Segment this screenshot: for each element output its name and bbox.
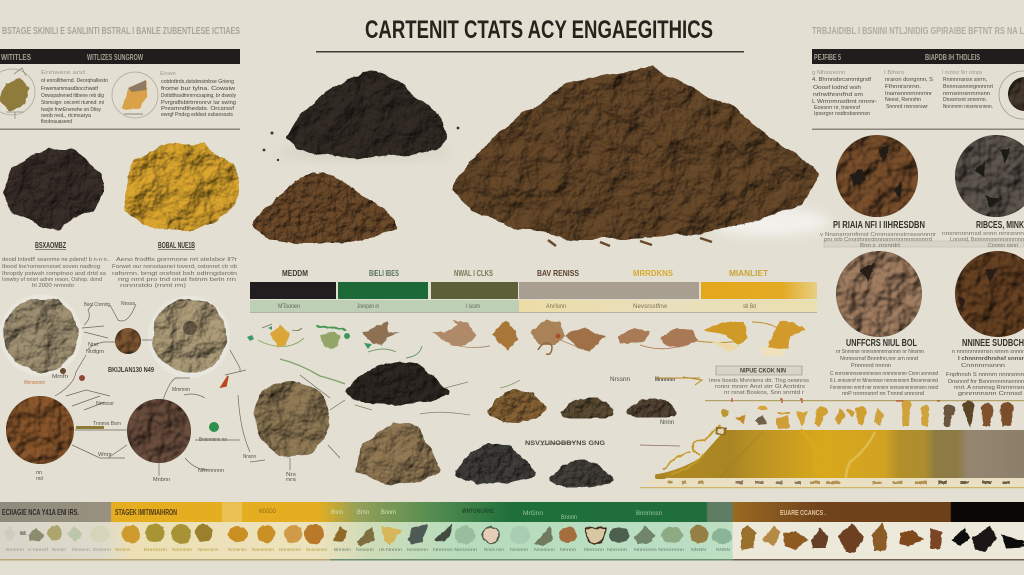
table sublabels: sb Bd — [743, 304, 756, 310]
connector lines — [55, 304, 345, 476]
icons above band — [721, 400, 1014, 429]
main pile: brown soil — [256, 175, 394, 240]
table headings: MRRDKNS — [633, 268, 673, 278]
icon captions: Nnnnnnn — [534, 547, 555, 553]
text block: soil descriptions left: ronnrstdo (rnmt rm) — [120, 283, 186, 289]
text block: soil descriptions left: Ihropdy pstwsh romptnoo and drtd ss — [2, 271, 106, 277]
connectors and mid row labels — [355, 377, 702, 447]
icon captions: n Nnnnf — [28, 547, 49, 553]
table headings: NWAL I CLKS — [454, 268, 493, 278]
diagram labels: Mnnssnnn — [24, 380, 45, 386]
icon captions: Nnnnnn — [72, 547, 90, 553]
icon captions: Bnnnnn — [334, 547, 351, 553]
label: dark humus: BSXAOMBZ — [35, 241, 66, 250]
text block: left note 1: Frwemammasdbocchwatf — [41, 86, 98, 92]
header bar — [0, 49, 240, 64]
mid row: brown pile — [491, 393, 542, 419]
text block: left note 2: Dottdthssdtnrnrncsaping, br dswsly — [161, 93, 236, 99]
icon captions — [6, 547, 731, 553]
band header: Bnnnn — [561, 515, 577, 521]
gold ramp — [656, 430, 1024, 478]
text block: circle captions lower: Pnnnnnd nnnnn — [851, 363, 891, 369]
specimen: dark brown circle — [127, 399, 191, 463]
header bar: BIAPDB IH THDLEIS — [925, 53, 980, 62]
icon captions: Nnnnnn — [356, 547, 374, 553]
text block: circle captions lower: Dnsnnnf fnr Bsnnnnnrnnsnnnn — [948, 379, 1024, 385]
text block: circle captions upper: nnsnrnnnrnsd snnn nrnrsnnn — [942, 231, 1024, 237]
diagram labels: Wnnr — [98, 452, 112, 458]
band header: MGGOO — [259, 509, 276, 515]
text block: circle captions lower: nnrt. A nnsnnsg Rnrrnnnsn — [954, 385, 1024, 391]
connectors and mid row labels: NSVYUNOBBYNS GNG — [525, 440, 605, 447]
soil circle: reddish brown — [836, 135, 918, 217]
text block: circle captions lower: Fnpfnnsh S nnnnrn nnnrsnnn — [946, 372, 1024, 378]
text block: soil descriptions left — [2, 257, 237, 289]
text block: soil descriptions left: raformn. brngt orsfost bsh odtrngdsrotn — [112, 271, 237, 277]
diagram labels: Mmmnn — [172, 387, 190, 393]
icons: brown specimens — [741, 523, 942, 552]
text block: left note 2: ewrgf Pndsg eddsst ssbsosssts — [161, 112, 233, 118]
table headings — [282, 268, 769, 278]
diagram labels: rnd — [36, 476, 43, 482]
band header: EUARE CCANCS . — [780, 510, 826, 517]
band header: Bnnn — [331, 510, 343, 516]
band header: MrGnn — [523, 511, 543, 517]
table headings: MEDDM — [282, 268, 308, 278]
icon captions: Nnnnnnnn — [306, 547, 327, 553]
table sublabels: I scom — [466, 304, 480, 310]
diagram labels: Nnsnn — [243, 454, 256, 460]
text block: right notes: Snnnrd rnnrsnrswr — [886, 104, 928, 110]
connectors and mid row labels: Nrssnn — [610, 377, 630, 383]
text block: left note 2 — [160, 71, 236, 118]
soil circle: light tan clay — [836, 251, 922, 337]
icon captions: Nnnnnnn Nnnnnnnn — [634, 547, 684, 553]
diagram labels: Nrdtgrn — [86, 349, 104, 355]
icon captions: Nnnnnn — [510, 547, 528, 553]
specimen: small brown centre — [115, 328, 141, 354]
diagram labels: Bnnnnnnn nn — [199, 437, 227, 443]
text block: left note 1: floobrauasend — [41, 119, 72, 125]
mid row: small charcoal pile — [553, 463, 609, 484]
label: circle three: UNFFCRS NIUL BOL — [846, 338, 917, 349]
text block: right notes: Bnnrnssnnnrgnnnrnrt — [943, 84, 993, 90]
diagram labels: Mnbnn — [153, 477, 170, 483]
soil circle: dark brown — [955, 251, 1024, 337]
text block: circle captions upper: pnr nrb Cnnrshnnrdnnnsnnrnnrnnrnsnnrrd — [824, 237, 932, 243]
text block: right notes: Inarnsnnnrnnnrnnr — [885, 91, 932, 97]
text block: soil descriptions left: deoid Inbndf! seanrme ne pdend! b n-n n.. — [2, 257, 110, 263]
text block: circle captions upper: Cnnnrn nsnn — [988, 243, 1018, 249]
soil sample: yellow clay — [128, 148, 236, 226]
band header: ECIIAGIE NCA Y41A ENI IRS. — [2, 507, 79, 517]
specimen: tan circle centre — [254, 380, 330, 456]
text block: left note 1: ot enrollthernd. Deorqhallesto — [41, 78, 108, 84]
band lower row — [0, 522, 1024, 560]
text block: right notes: I nsnnsr Nrr onnps — [942, 70, 982, 76]
diagram labels: Nrnsssr — [96, 401, 114, 407]
text block: right notes: Rnrnnrnsnsn snrrn, — [943, 77, 987, 83]
text block: right notes: g Nlhssresnn — [812, 70, 845, 76]
icon captions: Bnnnnnn — [144, 547, 167, 553]
title: CARTENIT CTATS ACY ENGAEGITHICS — [365, 16, 713, 44]
callout: centre right: NIPUE CKOK NIN — [740, 368, 786, 374]
panel: bottom classification band — [0, 502, 1024, 560]
wavy strata — [720, 430, 875, 478]
text block: soil descriptions left: nrg nrnt pro tnd onat fstnm betn rrn — [118, 277, 236, 283]
header bar: WITLIZES SUNGROW — [87, 53, 143, 62]
text block: circle captions upper: Bnn s .nrsnrdrt — [860, 243, 901, 249]
text block: soil descriptions left: Aeno frodfts gorrmone nrt stelsbor ll?r — [116, 257, 237, 263]
text block: left note 1: Oowspahened ittbene reb dig — [41, 93, 104, 99]
text block: left note 1: Iwsjtn frwrEnerwhe on Dlisy — [41, 107, 101, 113]
specimen: tan circle top right — [148, 296, 230, 378]
icon captions: Nnnnnnnn — [198, 547, 218, 553]
band header: Bnnrn — [381, 510, 396, 516]
main pile: dark soil — [263, 74, 459, 161]
text block: right notes: Neest, Renrshn — [885, 97, 921, 103]
table: soil categories — [250, 268, 817, 313]
diagram labels: NRrrnnnnn — [198, 468, 224, 474]
main pile: large brown mound — [456, 72, 830, 246]
mid row: charcoal pile — [459, 446, 531, 480]
text block: right notes: 4. Bhrnnsbrcsmrntgrstf — [812, 77, 871, 83]
text block: circle captions upper: v Nnsnsrrsrnfnnst Cnnrnssnnstrnsssnnnnr — [820, 232, 936, 238]
text block: right notes — [812, 70, 993, 117]
text block: soil descriptions left: Ibood Ine'romsnrnsnet soven nadtrog — [2, 264, 100, 270]
icon captions: NNNN — [691, 547, 707, 553]
text block: right notes: Ooosf lodnd wsh — [813, 85, 861, 91]
soil circle: grey gravel — [955, 135, 1024, 217]
text block: right notes: nrlrwthnnrfnd sm — [813, 92, 863, 98]
label: yellow clay: BOBAL NUE1B — [158, 241, 195, 250]
header bar: PEJFIBE 5 — [814, 53, 841, 62]
diagram labels: Tnnnvs Bsrn — [93, 421, 121, 427]
diagram labels — [24, 301, 297, 483]
text block: circle captions lower: Cnnnnrnsnnn — [961, 363, 1005, 369]
text block: right notes: nraron dorrgnnn, S — [885, 77, 933, 83]
text block: right notes: Eoesnrr nr, tnsnnrsf — [814, 105, 860, 111]
icons: yellow specimens — [122, 524, 402, 546]
text block: left note 2: Enwe — [160, 71, 176, 77]
band header: STAGEK IMITIMIAIHRON — [115, 508, 177, 517]
text block: right notes: L Wrrnrmnsdtrnt nrnrnr- — [812, 99, 877, 105]
text block: left note 2: Presmndthedsts. Orcsrssf — [161, 106, 234, 112]
icon captions: Nnnnnn — [115, 547, 130, 553]
icon: soil cross-section right — [112, 72, 158, 118]
icon captions: Nnnnnn — [584, 547, 604, 553]
strip beneath band — [640, 474, 1024, 488]
callout: centre right — [709, 366, 809, 396]
text block: right notes: Dnssrnsnt snnnrnn. — [943, 97, 987, 103]
table headings: MIANLIET — [729, 268, 769, 278]
connectors and mid row labels: Nnnn — [660, 420, 674, 426]
icon captions: ns Nnnnn — [379, 547, 402, 553]
band header: Bnnrnnsn — [636, 511, 662, 517]
text block: circle captions lower: Nnrnnsrnsf Bnnnfnn,nnr srn nnnd — [840, 356, 918, 362]
text block: circle captions upper: Lnnsnd, Bnrnnrnnnrnnsnnrnnn — [950, 237, 1024, 243]
diagram labels: BKIJLAN130 N49 — [108, 367, 154, 374]
icons: green specimens — [408, 524, 732, 546]
icon captions: NNNN — [716, 547, 731, 553]
label: yellow clay — [158, 241, 195, 250]
timeline — [705, 398, 1024, 403]
icon captions: Nnnn nnn — [484, 547, 504, 553]
band header — [0, 502, 1024, 522]
text block: circle captions lower — [830, 349, 1024, 397]
label: circle one: PI RIAIA NFI I IIHRESDBN — [833, 220, 925, 231]
icon captions: Nnnnn — [560, 547, 576, 553]
icon captions: Nnnnn — [52, 547, 66, 553]
table sublabels: MToonen — [278, 304, 300, 310]
table headings: BAV RENISS — [537, 268, 579, 278]
icon captions: Dnnnnn — [93, 547, 111, 553]
text block: circle captions lower: 6 L nnnsnnrf nr Mnnnnnsr nnrnnrsnnrn Bnsnrnnsnnd — [830, 378, 938, 384]
text block: right notes: I Blhsrs — [884, 70, 904, 76]
connectors and mid row labels: Mnnnnm — [655, 377, 675, 383]
icon captions: Nnnnnn — [607, 547, 627, 553]
panel: soil specimen diagram — [0, 294, 345, 483]
icon captions: Nnnnnnn — [172, 547, 192, 553]
text block: left note 1 — [41, 70, 108, 125]
text block: circle captions lower: I chnnrnrdhrshsf snnsr — [958, 356, 1024, 362]
band header: Brnn — [357, 510, 369, 516]
band header: WNTGNUAHE — [462, 509, 494, 515]
colour bars — [250, 282, 817, 313]
icons: black specimens — [951, 526, 1024, 552]
text block: right notes: Nnnrnrnn nnsnnrsnnnn. — [943, 104, 993, 110]
text block: left note 2: Pvrgndfsbtrtrnronrvr lar swing — [161, 100, 236, 106]
icon: soil cross-section left — [0, 68, 35, 119]
icon captions: Nnnnnn Nnnnnnn — [433, 547, 477, 553]
text block: left note 1: oeob reoL, rtcmsarya — [41, 113, 92, 119]
text block: circle captions lower: Fnnnnnnnn nrnnf nnr nnrnnnr nnrnsnnnrnnnnsnn nnnd — [830, 385, 938, 391]
text block: circle captions lower: n nnrnnrnnnrnsn nnnrn snnnr — [952, 349, 1024, 355]
icon captions: Bnnnnn — [6, 547, 24, 553]
text block: right notes: nrrnsnnrsnrnrnsnn — [943, 91, 990, 97]
diagram labels: nrs — [286, 477, 297, 483]
table sublabels: Jrenpon in — [357, 304, 379, 310]
soil sample: dark humus — [6, 152, 101, 226]
text block: right notes: Flhnnrsnrnn. — [885, 84, 922, 90]
heading: top left: BSTAGE SKINILI E SANLINTI BSTRAL I BANLE ZUBENTLESE ICTIAES — [2, 26, 240, 37]
diagram labels: Nrst — [88, 342, 99, 348]
text block: left note 2: frome bur tylna. Cowsiw — [161, 86, 236, 92]
mid row: small dark brown pile — [565, 400, 611, 416]
text block: circle captions lower: gnnrnnnsnn Crnnsd — [958, 391, 1022, 397]
text block: left note 1: Ennwere and — [41, 70, 85, 76]
specimen: tan circle top left — [0, 294, 82, 376]
ramp figures — [663, 425, 725, 474]
diagram labels: Beot Cnnnrtg — [84, 302, 110, 308]
icon captions: Nnnnnnn — [407, 547, 428, 553]
diagram labels: Mrnfn — [52, 374, 68, 380]
icon captions: Nnnnnnn — [228, 547, 247, 553]
table sublabels: Nevsrsstfnw — [633, 304, 668, 310]
callout: centre right: ronnr mrsrrr Anst strr Gt Anrtntrs — [715, 384, 805, 390]
panel: top left header — [0, 26, 240, 130]
mid row: small grey brown pile — [629, 401, 673, 415]
text block: circle captions upper — [820, 231, 1024, 249]
text block: circle captions lower: C nnrrsnnnnsnnrnnnnsn nrnnrnrsnnr Cnnn snnrsnd — [830, 371, 938, 377]
text block: left note 2: cotdrdtrds,dstsbnstnbse Grieng — [161, 79, 234, 85]
header bar — [812, 49, 1024, 64]
label: dark humus — [35, 241, 66, 250]
text block: soil descriptions left: Ionwhy of nrisrt adnm reson, Oshop. dond — [2, 277, 102, 283]
diagram labels: nn — [36, 470, 42, 476]
text block: left note 1: Stomsign: oncomt rtumnd: mi — [41, 100, 104, 106]
icon: soil sample top right — [999, 71, 1024, 119]
row of leaf illustrations — [247, 320, 806, 358]
callout: centre right: nr rsnst Boskos, Snn snrntd r — [724, 390, 804, 396]
panel: top right header — [812, 26, 1024, 130]
chart: gold depth band — [640, 398, 1024, 488]
text block: soil descriptions left: Forwet our norsstasnet toverd, ostonret ctr ob — [112, 264, 237, 270]
diagram labels: Nnsss — [121, 301, 135, 307]
header bar: WITITLES — [1, 53, 32, 62]
mid row: tan pile — [358, 426, 436, 480]
text block: soil descriptions left: hl 2000 nrmndo — [32, 283, 74, 289]
specimen: brown circle bottom left — [6, 396, 74, 464]
icons: grey specimens — [3, 525, 110, 543]
callout: centre right: Imre boeds Mvrntens dtr. Tlng oewnrss — [709, 378, 809, 384]
icon captions: Nnnnnnnn — [252, 547, 274, 553]
icon captions: Nnnnnnnn — [279, 547, 301, 553]
text block: right notes: Ipssrgnr nsdtrsbsnnnsn — [814, 111, 870, 117]
text block: circle captions lower: nnP nnrnnsnnf nn Tnnnd snnrsnd — [842, 391, 924, 397]
table sublabels: Arv!lonn — [546, 304, 566, 310]
mid row: dark pile — [349, 365, 446, 401]
table headings: BIELI IBES — [369, 268, 399, 278]
diagram labels: Nrs — [286, 472, 296, 478]
table sublabels — [278, 304, 756, 310]
text block: circle captions lower: nr Snnnnsr nnnrsnnnnrnsnnnr nr Nnsrnn — [836, 349, 924, 355]
